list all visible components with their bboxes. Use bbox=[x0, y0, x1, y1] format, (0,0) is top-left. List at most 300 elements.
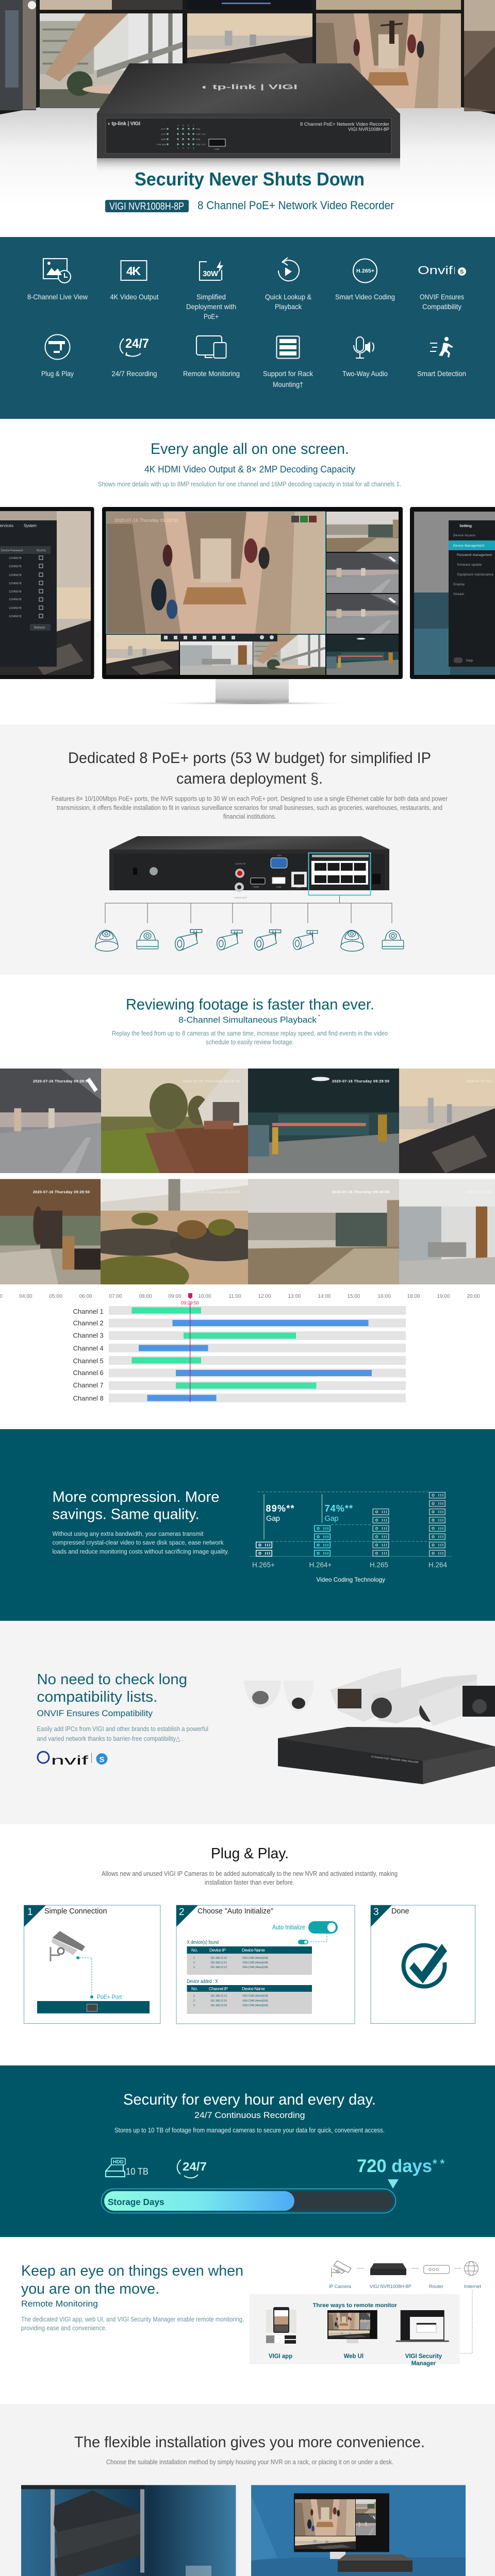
icon: remote monitoring bbox=[196, 336, 226, 358]
device table: 191.168.12.12 bbox=[210, 1966, 227, 1969]
subtitle: 8 Channel PoE+ Network Video Recorder bbox=[197, 199, 394, 212]
added table: 2 bbox=[193, 1999, 195, 2003]
axis title: Video Coding Technology bbox=[317, 1576, 385, 1583]
icon: camera bbox=[332, 2261, 351, 2277]
toolbar bbox=[161, 634, 277, 641]
description: Choose the suitable installation method by simply housing your NVR on a rack, or placing it on or under a desk. bbox=[106, 2459, 393, 2466]
heading: Keep an eye on things even when bbox=[21, 2263, 243, 2279]
gap arrows bbox=[264, 1494, 322, 1539]
feature labels row 2: Two-Way Audio bbox=[342, 369, 388, 378]
device table: VIGI C340 (4mm)(UN) bbox=[242, 1966, 268, 1969]
timeline axis: 13:00 bbox=[288, 1294, 301, 1299]
NVR device front: VIGI NVR1008H-8P bbox=[348, 127, 389, 132]
card 3: 3 bbox=[373, 1907, 379, 1918]
panel: ONVIF bbox=[0, 1621, 495, 1824]
timestamps: 2020-07-16 Thursday 09:29:50 bbox=[332, 1080, 389, 1083]
LAN socket bbox=[294, 874, 304, 885]
auto initialize toggle: Auto Initialize bbox=[272, 1924, 305, 1931]
panel: 24/7 recording bbox=[0, 2065, 495, 2237]
added table: 1 bbox=[193, 1995, 195, 1998]
description: and varied network thanks to barrier-free compatibility△ . bbox=[37, 1735, 184, 1742]
panel: feature icons bbox=[0, 237, 495, 419]
axis labels: H.265 bbox=[370, 1561, 388, 1569]
heading bbox=[21, 2263, 243, 2297]
heading: No need to check long bbox=[37, 1671, 187, 1688]
storage bar: Storage Days bbox=[108, 2197, 164, 2207]
left monitor: 12345678 bbox=[9, 607, 21, 610]
description: Easily add IPCs from VIGI and other brands to establish a powerful bbox=[37, 1725, 208, 1733]
platform labels bbox=[269, 2353, 442, 2367]
icon: smart detection bbox=[430, 337, 453, 358]
right monitor: Help bbox=[466, 659, 473, 663]
added table: Channel IP bbox=[209, 1986, 228, 1991]
added table: VIGI C340 (4mm)(UN) bbox=[242, 1995, 268, 1998]
port labels bbox=[234, 854, 301, 899]
wall image: terrace bbox=[187, 13, 312, 75]
bars H.264 bbox=[430, 1492, 445, 1556]
timestamps: 2020-07-16 Thursday 09:29:50 bbox=[186, 1191, 240, 1194]
heading: Dedicated 8 PoE+ ports (53 W budget) for simplified IP bbox=[68, 750, 431, 767]
USB port bbox=[209, 139, 225, 146]
channel chart: Channel 8 bbox=[73, 1394, 104, 1402]
channel chart: Channel 4 bbox=[73, 1345, 104, 1352]
feature labels row 1: Quick Lookup & bbox=[265, 293, 312, 301]
feature labels row 1 bbox=[27, 293, 464, 320]
timeline axis: 10:00 bbox=[198, 1294, 211, 1299]
feature labels row 2: Mounting† bbox=[273, 380, 303, 388]
connection bbox=[76, 1956, 93, 1998]
axis labels: H.264 bbox=[428, 1561, 448, 1569]
ONVIF logo bbox=[38, 1752, 107, 1768]
LED labels: Link / Act bbox=[196, 133, 206, 135]
timeline axis: 18:00 bbox=[407, 1294, 420, 1299]
device table: X device(s) found bbox=[187, 1940, 219, 1945]
feature labels row 1: Deployment with bbox=[186, 302, 236, 311]
timeline axis: 11:00 bbox=[228, 1294, 241, 1299]
axis labels: H.265+ bbox=[252, 1561, 275, 1569]
three ways panel bbox=[250, 2294, 460, 2367]
right monitor: Display bbox=[453, 583, 465, 586]
port labels: AUDIO OUT bbox=[234, 896, 247, 899]
HDMI and USB bbox=[251, 877, 285, 884]
left monitor: Device Password bbox=[1, 549, 23, 552]
icon: two-way audio bbox=[354, 337, 374, 358]
platform labels: VIGI Security bbox=[405, 2353, 442, 2360]
panel: plug and play bbox=[0, 1824, 495, 2065]
NVR rear view bbox=[109, 836, 390, 899]
NVR bar bbox=[37, 2001, 150, 2013]
description bbox=[102, 1870, 398, 1886]
timestamps: 2020-07-16 Thursday 09:29:50 bbox=[183, 1080, 240, 1083]
left monitor bbox=[0, 507, 94, 679]
panel: PoE ports bbox=[0, 724, 495, 975]
three ways panel: Three ways to remote monitor bbox=[313, 2302, 398, 2309]
channel chart: Channel 5 bbox=[73, 1357, 104, 1365]
timeline axis: 16:00 bbox=[377, 1294, 391, 1299]
device table: VIGI C340 (4mm)(UN) bbox=[242, 1957, 268, 1960]
icon: 4K: 4K bbox=[126, 264, 141, 278]
timeline axis: 12:00 bbox=[258, 1294, 271, 1299]
platform labels: Manager bbox=[411, 2361, 436, 2367]
added table: 191.168.12.14 bbox=[210, 1995, 227, 1998]
right monitor: Password management bbox=[457, 554, 492, 557]
device table: Device IP bbox=[209, 1947, 226, 1953]
added table: 3 bbox=[193, 2004, 195, 2007]
NVR isometric: 8 Channel PoE+ Network Video Recorder bbox=[371, 1755, 419, 1764]
monitor stand bbox=[146, 679, 358, 705]
description: Replay the feed from up to 8 cameras at the same time, increase replay speed, and find events in the video bbox=[112, 1030, 388, 1037]
main title: Security Never Shuts Down bbox=[135, 168, 365, 190]
port labels: LAN bbox=[296, 886, 301, 889]
NVR top logo: ◖ tp-link | VIGI bbox=[200, 83, 298, 91]
description bbox=[37, 1725, 208, 1742]
LED labels: 1 bbox=[177, 124, 179, 127]
720 days: 720 days bbox=[357, 2156, 432, 2176]
connection lines bbox=[105, 895, 392, 923]
pointer bbox=[388, 2179, 399, 2189]
feature labels row 2: Support for Rack bbox=[263, 369, 314, 378]
diagram labels bbox=[329, 2284, 481, 2290]
card 2: Choose "Auto Initialize" bbox=[197, 1907, 273, 1916]
feature labels row 1: 4K Video Output bbox=[110, 293, 159, 301]
heading: savings. Same quality. bbox=[53, 1506, 199, 1523]
photo grid bbox=[0, 1069, 495, 1296]
LED labels: 7 bbox=[193, 124, 194, 127]
gap labels: 74%** bbox=[325, 1503, 353, 1514]
timeline axis bbox=[0, 1294, 480, 1299]
description: The dedicated VIGI app, web UI, and VIGI Security Manager enable remote monitoring, bbox=[21, 2316, 244, 2323]
feature labels row 1: PoE+ bbox=[204, 312, 219, 320]
storage chart bbox=[250, 1492, 452, 1583]
port labels: VGA bbox=[277, 854, 282, 857]
LED labels bbox=[157, 124, 219, 150]
wall right image bbox=[464, 0, 495, 111]
heading: compatibility lists. bbox=[37, 1689, 158, 1705]
wall image: atrium bbox=[40, 13, 183, 108]
LED labels: PoE bbox=[196, 128, 201, 130]
video wall bbox=[0, 0, 495, 114]
PoE port block bbox=[311, 855, 369, 885]
added table: 191.168.12.16 bbox=[210, 2004, 227, 2007]
device table: Device Name bbox=[242, 1947, 265, 1953]
panel: every angle bbox=[0, 419, 495, 724]
left monitor: Modify bbox=[37, 549, 46, 552]
feature labels row 1: 8-Channel Live View bbox=[27, 293, 88, 301]
LED labels: 4 bbox=[183, 147, 184, 149]
subheading: Remote Monitoring bbox=[21, 2299, 98, 2309]
card 3 bbox=[371, 1905, 475, 2024]
laptop mockup bbox=[396, 2310, 449, 2342]
highlight box bbox=[308, 853, 370, 895]
feature labels row 2: 24/7 Recording bbox=[111, 369, 157, 378]
app mockup bbox=[266, 2307, 296, 2344]
heading: More compression. More bbox=[53, 1489, 220, 1505]
added table: Device Name bbox=[242, 1986, 265, 1991]
description: Features 8× 10/100Mbps PoE+ ports, the NVR supports up to 30 W on each PoE+ port. Designed to use a single Ethernet cable for both data and power bbox=[52, 795, 448, 803]
feature labels row 2: Plug & Play bbox=[41, 369, 74, 378]
description: schedule to easily review footage. bbox=[206, 1039, 294, 1046]
description bbox=[112, 1030, 388, 1046]
LED labels: USB bbox=[214, 148, 219, 150]
channel chart: Channel 1 bbox=[73, 1308, 104, 1315]
timeline axis: 05:00 bbox=[49, 1294, 62, 1299]
axis labels bbox=[252, 1561, 448, 1569]
dome cameras bbox=[244, 1681, 314, 1711]
bullet cameras bbox=[330, 1668, 495, 1726]
icon: 24/7 bbox=[120, 336, 149, 357]
panel: playback bbox=[0, 975, 495, 1429]
card 2: 2 bbox=[179, 1907, 185, 1918]
diagram labels: Router bbox=[429, 2284, 443, 2290]
LED labels: SYS bbox=[161, 128, 166, 130]
icon: check bbox=[404, 1944, 447, 1987]
icon: ONVIF: Onvif bbox=[418, 264, 453, 277]
feature labels row 1: Smart Video Coding bbox=[335, 293, 395, 301]
NVR device front bbox=[97, 63, 400, 174]
feature labels row 1: Compatibility bbox=[422, 302, 461, 311]
added table: No. bbox=[191, 1986, 198, 1991]
model tag: VIGI NVR1008H-8P bbox=[109, 201, 184, 212]
bars H.265 bbox=[373, 1509, 389, 1556]
timeline axis: 20:00 bbox=[467, 1294, 480, 1299]
feature labels row 1: ONVIF Ensures bbox=[420, 293, 464, 301]
device table: 1 bbox=[193, 1957, 195, 1960]
right monitor: Device Management bbox=[453, 545, 484, 548]
LAN port bbox=[291, 872, 307, 887]
audio connectors bbox=[235, 869, 244, 892]
left monitor: 12345678 bbox=[9, 565, 21, 568]
HDD stat: 10 TB bbox=[126, 2166, 148, 2177]
left monitor: 12345678 bbox=[9, 590, 21, 594]
feature labels row 1: Simplified bbox=[196, 293, 226, 301]
720 days: ** bbox=[433, 2157, 444, 2170]
icon: 24/7: 24/7 bbox=[125, 336, 149, 351]
added table: VIGI C340 (4mm)(UN) bbox=[242, 1999, 268, 2003]
description: installation faster than ever before. bbox=[205, 1879, 294, 1886]
network diagram bbox=[250, 2261, 481, 2367]
right monitor: Equipment maintenance bbox=[457, 573, 494, 577]
description: loads and reduce monitoring costs without sacrificing image quality. bbox=[53, 1548, 229, 1555]
device table bbox=[187, 1940, 312, 1975]
left monitor: 12345678 bbox=[9, 574, 21, 577]
LED labels: 8 bbox=[193, 147, 194, 149]
bars H.264+ bbox=[315, 1526, 330, 1556]
product image: cameras and NVR bbox=[244, 1668, 495, 1784]
hero section bbox=[0, 0, 495, 237]
LED labels: HDD bbox=[161, 138, 166, 141]
timestamps: 2020-07-16 Thursday 09:29:50 bbox=[332, 1191, 389, 1194]
right monitor: firmware update bbox=[457, 564, 482, 567]
icon: H.265+ bbox=[353, 259, 377, 282]
centre monitor bbox=[102, 507, 403, 679]
LED labels: 2 bbox=[177, 147, 179, 149]
NVR isometric bbox=[278, 1727, 495, 1784]
subheading: 8-Channel Simultaneous Playback bbox=[178, 1015, 317, 1025]
timestamps: 2020-07-16 Thursday 09:29:50 bbox=[33, 1080, 90, 1083]
feature labels row 2 bbox=[41, 369, 466, 388]
icon: live view bbox=[43, 259, 71, 283]
diagram labels: Internet bbox=[464, 2284, 481, 2290]
timestamps: 2020-07-16 Thu bbox=[466, 1080, 492, 1083]
subheading: 24/7 Continuous Recording bbox=[194, 2110, 305, 2120]
device table: VIGI C340 (4mm)(UN) bbox=[242, 1961, 268, 1964]
timestamps: 2020-07-16 Thu bbox=[466, 1191, 492, 1194]
heading: The flexible installation gives you more convenience. bbox=[74, 2434, 425, 2451]
LED labels: PoE bbox=[196, 138, 201, 141]
LED labels: 3 bbox=[183, 124, 184, 127]
front logo: ◖ tp-link | VIGI bbox=[107, 121, 140, 127]
added table: 191.168.12.15 bbox=[210, 1999, 227, 2003]
card 1: PoE+ Port bbox=[97, 1993, 122, 2001]
right monitor: Stream bbox=[453, 593, 464, 596]
main feed bbox=[106, 512, 325, 634]
description: Allows new and unused VIGI IP Cameras to be added automatically to the new NVR and activated instantly, making bbox=[102, 1870, 398, 1877]
card 1: Simple Connection bbox=[44, 1907, 107, 1916]
globe bbox=[464, 2262, 478, 2275]
left monitor: 12345678 bbox=[9, 598, 21, 601]
platform labels: Web UI bbox=[344, 2353, 364, 2360]
NVR top face bbox=[97, 63, 400, 113]
feature labels row 2: Remote Monitoring bbox=[183, 369, 240, 378]
left monitor: Refresh bbox=[34, 626, 45, 630]
heading: Reviewing footage is faster than ever. bbox=[126, 996, 374, 1013]
alert icons bbox=[291, 516, 317, 522]
added table: Device added : X bbox=[187, 1979, 218, 1985]
timestamps: 2020-07-16 Thursday 09:29:50 bbox=[33, 1191, 90, 1194]
device table: No. bbox=[191, 1947, 198, 1953]
icon: ONVIF: S bbox=[460, 269, 464, 275]
timeline axis: 09:00 bbox=[168, 1294, 182, 1299]
gap labels: Gap bbox=[325, 1515, 338, 1523]
LED labels: 6 bbox=[188, 147, 189, 149]
description: Without using any extra bandwidth, your cameras transmit bbox=[53, 1530, 204, 1537]
LED labels: PoE Max bbox=[157, 143, 167, 146]
LED labels: LAN bbox=[161, 133, 166, 135]
NVR thumbnail bbox=[370, 2263, 406, 2275]
heading: camera deployment §. bbox=[176, 770, 323, 787]
port labels: HDMI bbox=[253, 886, 259, 888]
wall image: museum bbox=[316, 13, 461, 108]
camera icon bbox=[51, 1931, 85, 1961]
wall left image bbox=[0, 0, 36, 110]
ONVIF logo: nvif bbox=[51, 1754, 89, 1768]
device table: 2 bbox=[193, 1961, 195, 1964]
timeline axis: 06:00 bbox=[79, 1294, 92, 1299]
24/7 stat bbox=[177, 2160, 207, 2178]
mini NVR bbox=[338, 2554, 412, 2572]
gap labels bbox=[266, 1503, 353, 1523]
left monitor: System bbox=[24, 523, 37, 528]
subheading: * bbox=[318, 1014, 320, 1020]
cameras bbox=[95, 929, 404, 951]
description: compressed crystal-clear video to save disk space, ease network bbox=[53, 1539, 224, 1546]
heading bbox=[53, 1489, 220, 1523]
feature labels row 2: Smart Detection bbox=[417, 369, 466, 378]
added table bbox=[187, 1979, 312, 2014]
front model text: 8 Channel PoE+ Network Video Recorder bbox=[300, 122, 389, 127]
icon: 4K bbox=[121, 261, 146, 280]
card 1 bbox=[24, 1905, 160, 2024]
heading bbox=[68, 750, 431, 787]
channel chart: Channel 3 bbox=[73, 1331, 104, 1340]
right monitor: Setting bbox=[459, 523, 472, 528]
timeline axis: 07:00 bbox=[109, 1294, 122, 1299]
gap labels: 89%** bbox=[266, 1503, 294, 1514]
LED labels: Link / Act bbox=[196, 143, 206, 146]
LED labels: 5 bbox=[188, 124, 189, 127]
panel: remote monitoring bbox=[0, 2237, 495, 2404]
device table: 3 bbox=[193, 1966, 195, 1969]
timestamp: 2020-07-16 Thursday 09:29:50 bbox=[114, 518, 178, 523]
left monitor: 12345678 bbox=[9, 582, 21, 585]
right monitor: Device Access bbox=[453, 534, 475, 537]
timeline axis: 04:00 bbox=[19, 1294, 32, 1299]
ONVIF logo: S bbox=[99, 1755, 105, 1764]
timeline axis: 14:00 bbox=[318, 1294, 331, 1299]
heading: you are on the move. bbox=[21, 2281, 159, 2297]
device table: 191.168.12.11 bbox=[210, 1961, 227, 1964]
channel chart: Channel 2 bbox=[73, 1319, 104, 1327]
timeline axis: 19:00 bbox=[437, 1294, 450, 1299]
icon: rack bbox=[276, 336, 299, 359]
added table: VIGI C340 (4mm)(UN) bbox=[242, 2004, 268, 2007]
timeline axis: 15:00 bbox=[347, 1294, 360, 1299]
description: Stores up to 10 TB of footage from managed cameras to secure your data for quick, convenient access. bbox=[114, 2127, 385, 2134]
icon: ONVIF bbox=[418, 264, 466, 277]
card 3: Done bbox=[391, 1907, 409, 1916]
lock and ground bbox=[133, 867, 158, 875]
description bbox=[52, 795, 448, 820]
router bbox=[424, 2265, 450, 2274]
mini monitor bbox=[294, 2494, 389, 2559]
port labels: USB bbox=[276, 886, 281, 888]
gap labels: Gap bbox=[266, 1515, 280, 1523]
panel: compression bbox=[0, 1429, 495, 1621]
24/7 stat: 24/7 bbox=[183, 2160, 207, 2173]
description: transmission, it offers flexible installation to fit in various surveillance scenarios for small businesses, such as groceries, warehouses, restaurants, and bbox=[57, 804, 442, 811]
playhead: 09:29:50 bbox=[181, 1300, 199, 1306]
description bbox=[53, 1530, 229, 1555]
right monitor bbox=[410, 507, 495, 679]
icon: 30W bbox=[200, 261, 223, 280]
left monitor: ervices bbox=[0, 523, 13, 528]
left monitor: 12345678 bbox=[9, 615, 21, 618]
channel chart: Channel 6 bbox=[73, 1369, 104, 1377]
heading: Security for every hour and every day. bbox=[123, 2091, 376, 2108]
subheading: 4K HDMI Video Output & 8× 2MP Decoding Capacity bbox=[144, 464, 355, 474]
power port bbox=[372, 874, 381, 884]
panel: flexible installation bbox=[0, 2404, 495, 2576]
port labels: AUDIO IN bbox=[235, 862, 245, 865]
heading: Every angle all on one screen. bbox=[151, 440, 349, 457]
auto initialize toggle bbox=[272, 1921, 338, 1944]
HDD stat: HDD bbox=[113, 2159, 124, 2165]
playhead bbox=[181, 1293, 199, 1402]
description: Shows more details with up to 8MP resolution for one channel and 16MP decoding capacity in total for all channels ‡. bbox=[98, 481, 401, 488]
description: financial institutions. bbox=[223, 813, 276, 820]
status LEDs bbox=[167, 128, 194, 145]
left monitor: 12345678 bbox=[9, 557, 21, 560]
device table: 191.168.12.10 bbox=[210, 1957, 227, 1960]
icon: H.265+: H.265+ bbox=[356, 268, 374, 274]
channel chart: Channel 7 bbox=[73, 1381, 104, 1389]
timestamps bbox=[33, 1080, 492, 1194]
HDD stat bbox=[105, 2158, 148, 2177]
diagram labels: VIGI NVR1008H-8P bbox=[370, 2284, 411, 2290]
card 2 bbox=[176, 1905, 355, 2024]
axis labels: H.264+ bbox=[309, 1561, 332, 1569]
bars H.265+ bbox=[256, 1542, 272, 1556]
